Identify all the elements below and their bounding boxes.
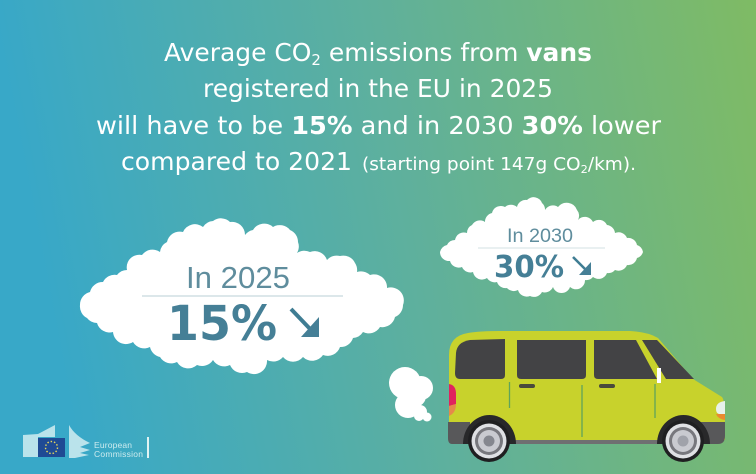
headlight [716, 401, 725, 420]
title: heading text: emissions from [321, 38, 526, 67]
windows [455, 339, 694, 379]
title: heading text: 2 [311, 51, 321, 69]
icon: down arrow [573, 257, 591, 275]
title: heading text: /km). [588, 154, 636, 175]
logo building left [23, 425, 55, 457]
EU flag [38, 438, 65, 457]
cloud: In 2025 callout [80, 218, 404, 374]
title: heading text: 2 [581, 163, 588, 176]
label: In 2030: In 2030 [507, 226, 573, 247]
rear wheel [468, 420, 510, 462]
cloud: In 2030 callout [440, 197, 643, 297]
mirror [657, 368, 661, 383]
front wheel [662, 420, 704, 462]
value: 15%: 15% [167, 296, 277, 352]
icon: exhaust smoke [389, 367, 433, 422]
title: heading text [96, 38, 662, 176]
icon: down arrow [291, 309, 319, 337]
title: heading text: Average CO [164, 38, 312, 67]
value: 30%: 30% [494, 250, 564, 285]
logo: European Commission [23, 425, 149, 459]
title: heading text: vans [526, 38, 592, 67]
bumper front [700, 422, 725, 444]
tail light [449, 384, 456, 416]
door lines and handles [510, 382, 655, 437]
sill [510, 440, 662, 444]
label: In 2025: In 2025 [186, 260, 290, 295]
title: heading text: will have to be 15% and in 2030 30% lower [96, 111, 662, 140]
title: heading text: (starting point 147g CO [362, 154, 574, 175]
title: heading text: compared to 2021 [121, 147, 352, 176]
van illustration [448, 331, 725, 462]
bumper rear [448, 422, 470, 444]
title: heading text: registered in the EU in 2025 [203, 74, 553, 103]
wheel arches [463, 415, 516, 444]
logo text: Commission [94, 449, 143, 459]
van body [449, 331, 725, 440]
logo building right [69, 425, 90, 458]
logo text: European [94, 440, 132, 450]
